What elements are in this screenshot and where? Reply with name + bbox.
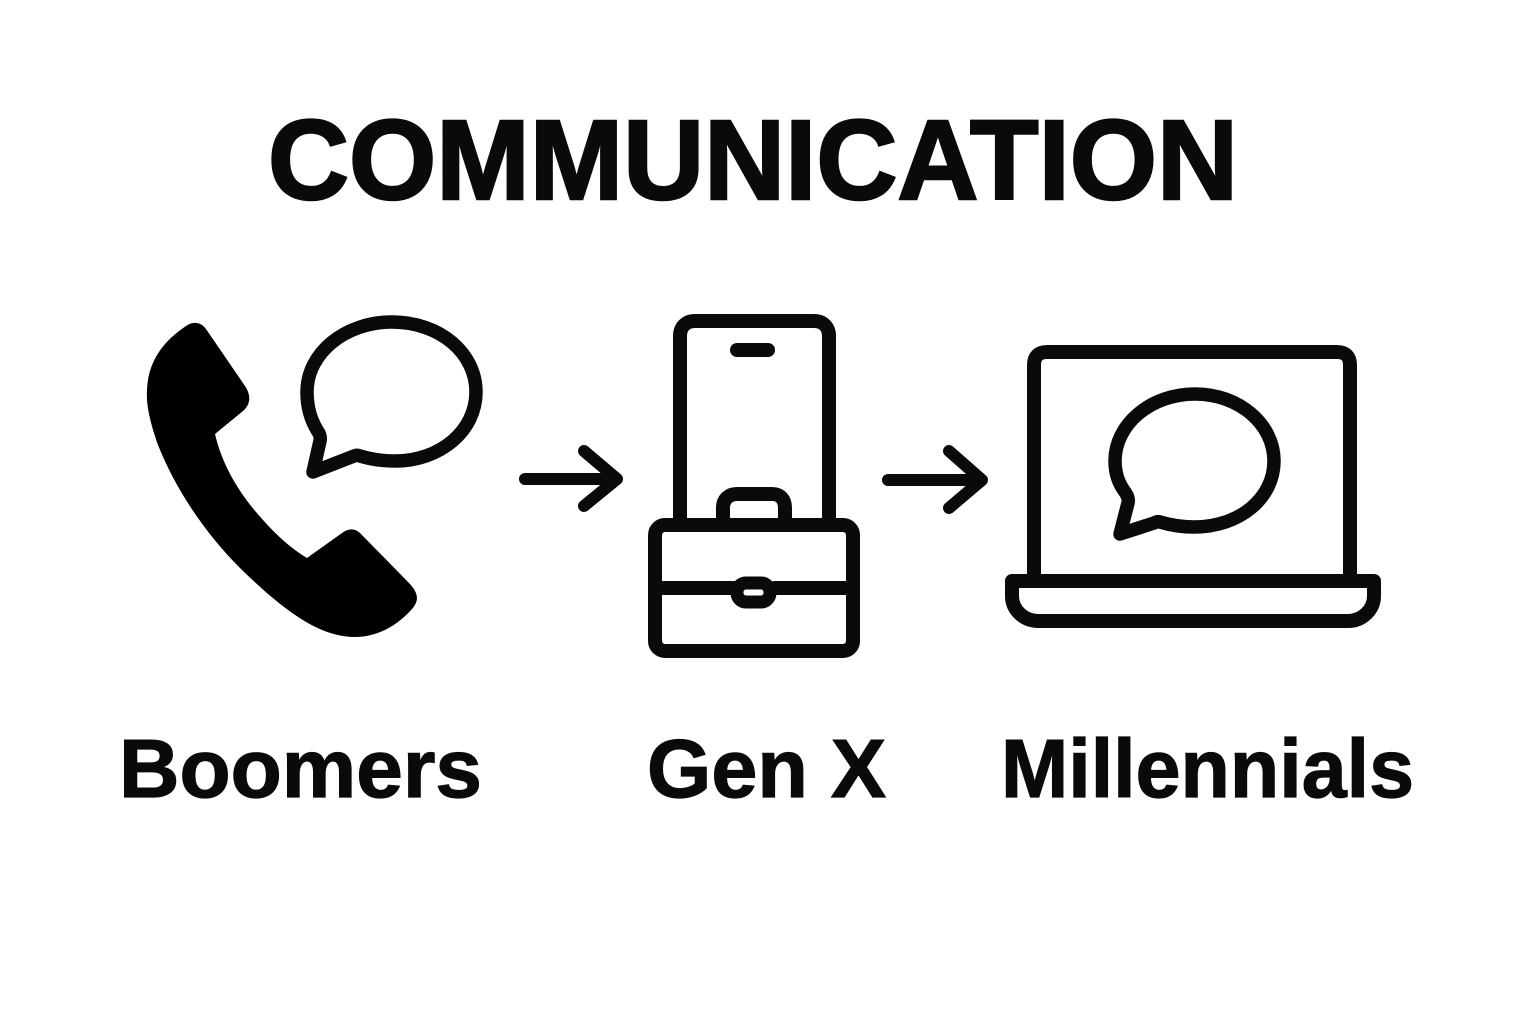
phone body bbox=[680, 321, 829, 520]
laptop base bbox=[1012, 581, 1374, 621]
icon: laptop with speech bubble bbox=[1012, 352, 1374, 621]
briefcase clasp bbox=[737, 583, 770, 602]
briefcase handle bbox=[723, 494, 785, 520]
icon: speech bubble, Boomers bbox=[307, 322, 476, 472]
laptop screen bbox=[1034, 352, 1350, 580]
briefcase band bbox=[655, 581, 853, 595]
label: Boomers: Boomers bbox=[119, 722, 482, 815]
phone speaker bbox=[737, 343, 768, 357]
arrow: Gen X to Millennials bbox=[888, 451, 982, 508]
icon: telephone handset bbox=[147, 323, 417, 637]
label: Gen X: Gen X bbox=[647, 722, 886, 815]
briefcase body bbox=[655, 525, 853, 651]
title: COMMUNICATION bbox=[268, 97, 1238, 223]
arrow: Boomers to Gen X bbox=[525, 451, 617, 506]
icon: phone in briefcase bbox=[655, 321, 853, 651]
laptop speech bubble bbox=[1115, 394, 1274, 534]
label: Millennials: Millennials bbox=[1001, 722, 1414, 815]
